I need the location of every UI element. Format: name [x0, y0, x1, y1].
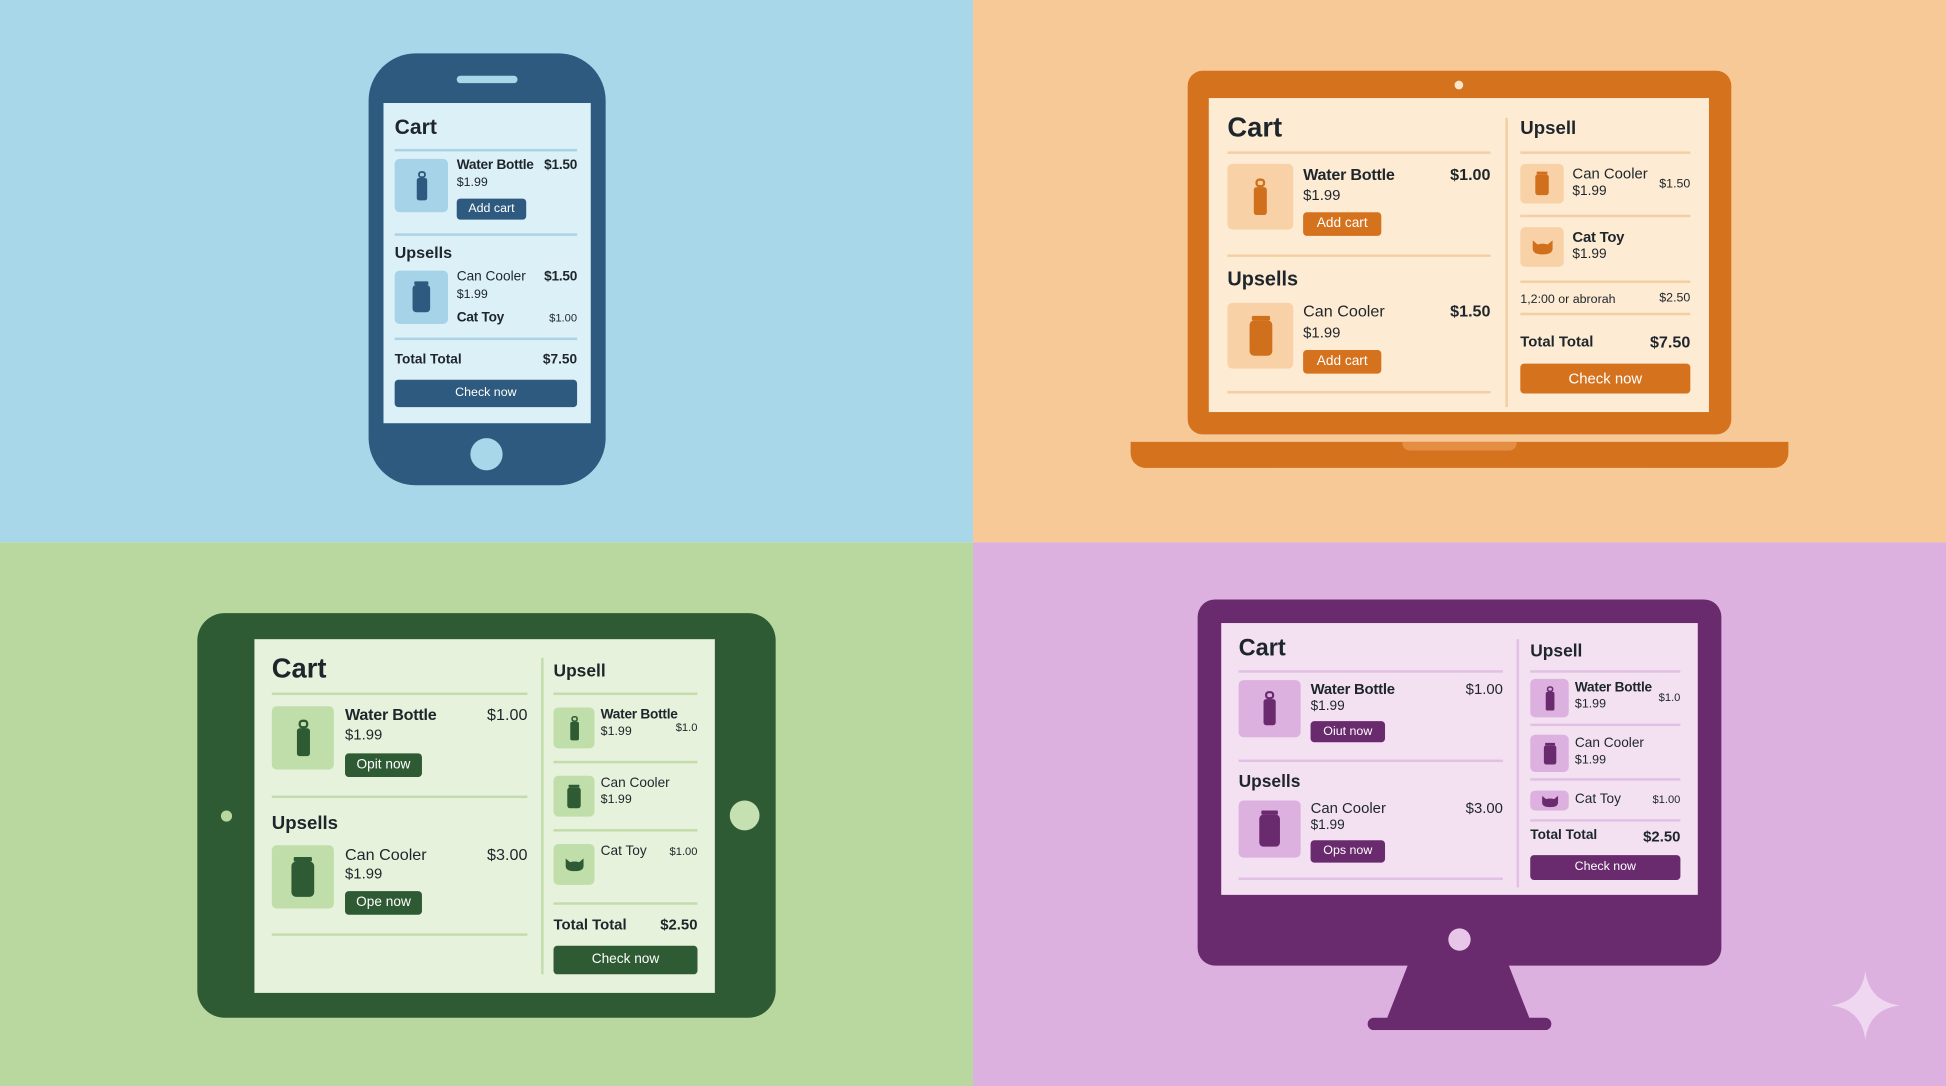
upsell: can cooler [554, 776, 670, 817]
button: Ope now: Ope now [356, 895, 411, 910]
upsell: cat toy: $1.00 [1652, 793, 1680, 805]
upsell: water bottle [1530, 678, 1680, 718]
button: Add cart: Add cart [1317, 216, 1368, 231]
upsell items: Cat Toy [457, 310, 504, 325]
button: Check now: Check now [455, 386, 517, 400]
button: Ops now [1311, 840, 1385, 863]
total row: $7.50 [543, 352, 577, 367]
background: orange quadrant [973, 0, 1946, 542]
button: Opit now [345, 753, 422, 777]
upsell: can cooler: $1.99 [1572, 184, 1607, 199]
upsell items: $1.50 [544, 269, 577, 284]
phone screen [383, 103, 591, 423]
upsell: water bottle [554, 707, 697, 748]
upsell: cat toy [554, 844, 697, 885]
upsell: can cooler: $1.50 [1659, 177, 1690, 191]
device: laptop [1130, 70, 1788, 468]
device: phone [369, 53, 606, 485]
upsell: cat toy: Cat Toy [1572, 228, 1624, 246]
item: water bottle: Water Bottle [1311, 680, 1395, 698]
button: Add cart: Add cart [468, 202, 515, 215]
item: water bottle: $1.00 [1466, 680, 1503, 698]
monitor stand [1368, 966, 1552, 1030]
upsell: can cooler: $1.99 [601, 793, 632, 807]
heading: Cart: Cart [1239, 635, 1286, 662]
item: water bottle: $1.00 [487, 705, 527, 724]
upsell: can cooler: Can Cooler [601, 776, 670, 791]
upsell: can cooler [1238, 799, 1503, 863]
phone home button [470, 438, 503, 470]
total row: Total Total [395, 352, 462, 367]
laptop lid [1188, 71, 1731, 434]
upsell: can cooler [1520, 164, 1690, 204]
heading: Upsells: Upsells [395, 243, 452, 262]
monitor button [1448, 928, 1471, 951]
button: Add cart: Add cart [1317, 354, 1368, 369]
button: Add cart [1303, 350, 1381, 374]
upsell: can cooler: Can Cooler [345, 845, 427, 864]
upsell: cat toy: Cat Toy [601, 844, 647, 859]
upsell: water bottle: $1.0 [1659, 691, 1680, 704]
upsell: can cooler: $3.00 [1466, 799, 1503, 817]
total row: Total Total [554, 916, 627, 933]
heading: Upsell: Upsell [1520, 118, 1576, 139]
tablet screen [254, 639, 715, 993]
upsell: water bottle: $1.99 [1575, 698, 1606, 711]
item: water bottle [394, 158, 577, 220]
icon: sparkle [1831, 971, 1900, 1040]
button: Check now [554, 946, 697, 974]
panel: upsell column: 1,2:00 or abrorah [1520, 293, 1616, 307]
upsell: can cooler: Can Cooler [1303, 302, 1385, 320]
upsell: can cooler: $1.99 [1575, 753, 1606, 767]
total row: Total Total [1530, 828, 1597, 843]
upsell: water bottle: Water Bottle [601, 707, 678, 722]
upsell: cat toy: Cat Toy [1575, 792, 1621, 807]
heading: Upsells: Upsells [1239, 771, 1300, 791]
heading: Upsell: Upsell [554, 660, 606, 680]
upsell: can cooler [1228, 302, 1491, 374]
heading: Upsell: Upsell [1530, 640, 1582, 660]
panel: upsell column [554, 660, 698, 974]
item: water bottle: $1.99 [1303, 186, 1340, 204]
item: water bottle: $1.99 [1311, 699, 1345, 714]
upsell: can cooler: $1.50 [1450, 302, 1491, 320]
item: water bottle: $1.99 [345, 726, 382, 743]
button: Check now: Check now [592, 952, 659, 967]
upsell: water bottle: $1.99 [601, 725, 632, 738]
upsell: can cooler [1530, 734, 1644, 772]
button: Add cart [457, 199, 526, 220]
upsell: can cooler: $1.99 [1311, 818, 1345, 833]
monitor body [1198, 599, 1721, 966]
button: Opit now: Opit now [357, 757, 410, 772]
item: water bottle: $1.00 [1450, 165, 1491, 184]
laptop camera [1455, 81, 1463, 89]
tablet camera [221, 810, 232, 822]
upsell: cat toy: $1.00 [670, 845, 697, 858]
button: Check now [395, 380, 577, 407]
background: blue quadrant [0, 0, 973, 542]
upsell: cat toy [1520, 227, 1624, 267]
upsell: can cooler: $3.00 [487, 845, 527, 864]
icon: bottle [1227, 164, 1293, 230]
upsell: can cooler [272, 845, 527, 915]
device: desktop monitor [1198, 600, 1722, 1030]
upsell items [394, 269, 577, 325]
button: Add cart [1303, 212, 1381, 236]
heading: Cart: Cart [272, 653, 326, 684]
button: Check now: Check now [1568, 370, 1642, 387]
upsell: cat toy [1530, 790, 1680, 810]
upsell items: Can Cooler [457, 269, 526, 284]
heading: Upsells: Upsells [272, 813, 338, 834]
button: Ope now [345, 891, 422, 915]
laptop screen [1209, 98, 1709, 412]
button: Oiut now [1311, 721, 1385, 742]
upsell: can cooler: Can Cooler [1311, 799, 1386, 817]
tablet home button [730, 801, 760, 830]
button: Ops now: Ops now [1323, 844, 1372, 858]
upsell: can cooler: $1.99 [345, 865, 382, 882]
button: Check now: Check now [1575, 860, 1636, 874]
button: Oiut now: Oiut now [1323, 724, 1372, 738]
total row [394, 352, 577, 367]
monitor screen [1221, 623, 1698, 895]
panel: upsell column: $2.50 [1659, 292, 1690, 305]
item: water bottle: Water Bottle [457, 158, 534, 173]
laptop base [1131, 442, 1788, 468]
upsell: can cooler: Can Cooler [1572, 165, 1648, 182]
total row: Total Total [1520, 333, 1593, 350]
upsell: cat toy: $1.99 [1572, 247, 1607, 262]
upsell items: $1.00 [549, 312, 577, 324]
upsell: water bottle: $1.0 [676, 721, 697, 734]
item: water bottle: $1.99 [457, 176, 488, 190]
item: water bottle: Water Bottle [1303, 165, 1395, 184]
panel: upsell column: $2.50 [660, 916, 697, 933]
upsell: can cooler: Can Cooler [1575, 736, 1644, 751]
button: Check now [1520, 364, 1690, 393]
panel: upsell column [1530, 640, 1680, 880]
item: water bottle: $1.50 [544, 158, 577, 173]
item: water bottle [272, 705, 527, 777]
phone speaker [457, 76, 518, 83]
panel: upsell column: $2.50 [1643, 828, 1680, 845]
heading: Cart: Cart [395, 115, 437, 139]
background: purple quadrant [973, 542, 1946, 1086]
panel: upsell column [1520, 118, 1690, 394]
upsell items: $1.99 [457, 288, 488, 302]
item: water bottle [1238, 680, 1503, 742]
upsell: can cooler: $1.99 [1303, 324, 1340, 341]
background: green quadrant [0, 542, 973, 1086]
item: water bottle: Water Bottle [345, 705, 436, 724]
icon: can [395, 271, 448, 324]
button: Check now [1530, 855, 1680, 880]
laptop notch [1402, 442, 1517, 451]
icon: can [1227, 303, 1293, 369]
heading: Upsells: Upsells [1227, 269, 1298, 290]
panel: upsell column: $7.50 [1650, 333, 1690, 351]
icon: bottle [395, 159, 448, 212]
upsell: water bottle: Water Bottle [1575, 680, 1652, 695]
item: water bottle [1228, 164, 1491, 236]
heading: Cart: Cart [1227, 112, 1282, 143]
device: tablet [197, 613, 776, 1018]
